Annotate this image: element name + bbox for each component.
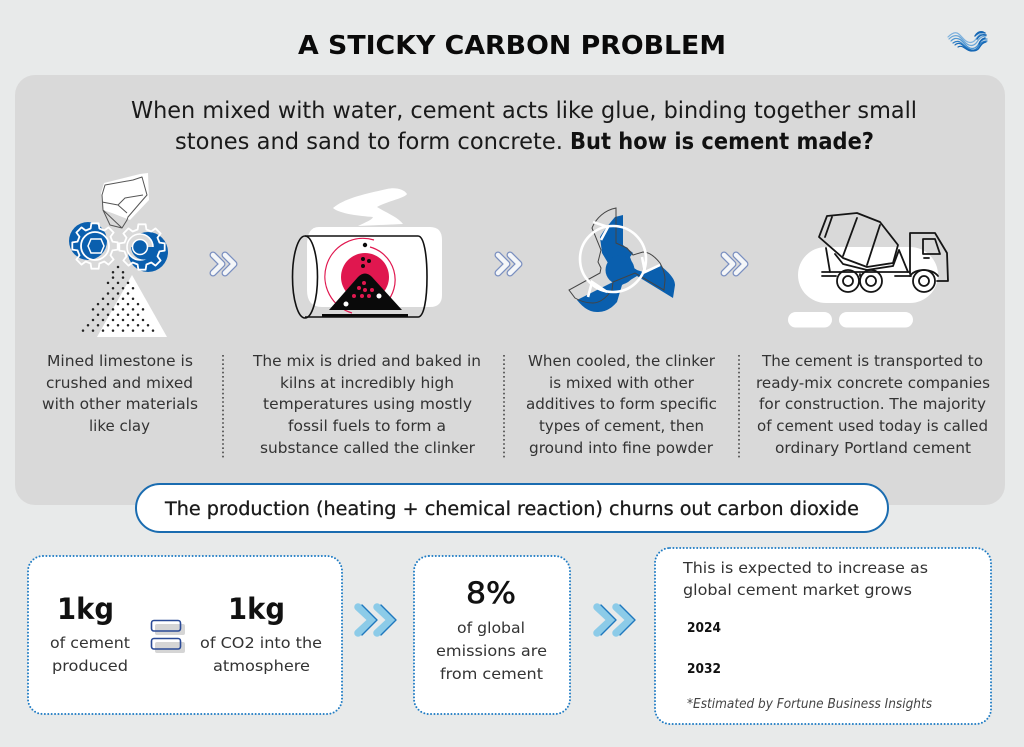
icon: wave logo [948,32,987,51]
text: step 2: The mix is dried and baked in [252,352,481,370]
panel: market growth [655,548,991,724]
arrow: step 1 to 2 [213,255,234,273]
text: step 3: types of cement, then [539,417,704,435]
intro text: stones and sand to form concrete. [175,127,563,155]
icon: limestone crushed by gears [69,173,168,337]
stat: 1kg of CO2: of CO2 into the [200,634,322,652]
stat: 1kg of cement [50,592,130,675]
stat: 1kg of cement: of cement [50,634,130,652]
stat: 1kg of CO2: atmosphere [213,657,310,675]
intro text: But how is cement made? [570,127,874,155]
panel: 1kg equals 1kg [28,556,342,714]
text: step 4 [756,352,990,457]
text: step 2: temperatures using mostly [263,395,472,413]
intro text: When mixed with water, cement acts like glue, binding together small [131,96,917,124]
label: 2024: 2024 [687,621,721,636]
text: step 3: ground into fine powder [529,439,714,457]
text: step 2: kilns at incredibly high [280,374,454,392]
text: market growth heading: This is expected to increase as [682,559,928,577]
text: step 1: crushed and mixed [46,374,193,392]
panel: 8 percent of emissions: 8% [466,576,516,610]
panel: 8 percent of emissions: of global [457,619,525,637]
panel: 8 percent of emissions [414,556,570,714]
footnote: *Estimated by Fortune Business Insights [687,696,932,712]
stat: 1kg of CO2: 1kg [228,592,285,626]
text: step 4: ready-mix concrete companies [756,374,990,392]
text: step 2 [252,352,481,457]
callout: production pill [136,484,888,532]
icon: cement mixer truck [788,213,948,328]
title: A STICKY CARBON PROBLEM [298,31,726,61]
panel: how cement is made [15,75,1005,505]
arrow: to 8 percent [358,605,396,635]
text: step 1: like clay [89,417,150,435]
arrow: step 3 to 4 [724,255,745,273]
text: step 3: is mixed with other [549,374,695,392]
stat: 1kg of CO2 [200,592,322,675]
label: 2032: 2032 [687,662,721,677]
text: step 2: substance called the clinker [260,439,476,457]
text: step 4: for construction. The majority [759,395,986,413]
panel: 8 percent of emissions: from cement [440,665,543,683]
stat: 1kg of cement: 1kg [57,592,114,626]
text: step 4: The cement is transported to [761,352,983,370]
text: step 3: additives to form specific [526,395,717,413]
icon: right gear [119,224,168,272]
text: step 2: fossil fuels to form a [288,417,446,435]
icon: equals sign [152,620,185,653]
text: step 1: with other materials [42,395,198,413]
text: step 1: Mined limestone is [47,352,193,370]
stat: 1kg of cement: produced [52,657,128,675]
text: step 3: When cooled, the clinker [528,352,716,370]
text: step 3 [526,352,717,457]
text: market growth heading [682,559,928,599]
icon: clinker mixing blades [569,208,675,312]
arrow: to market growth [597,605,635,635]
text: step 4: of cement used today is called [757,417,988,435]
text: step 1 [42,352,198,435]
icon: rock [101,173,149,228]
panel: 8 percent of emissions: emissions are [436,642,547,660]
arrow: step 2 to 3 [498,255,519,273]
icon: left gear [69,222,118,269]
icon: powder pile [83,267,167,337]
icon: kiln [292,188,442,318]
callout: production pill: The production (heating + chemical reaction) churns out carbon dioxide [164,499,859,520]
text: step 4: ordinary Portland cement [775,439,971,457]
intro text [131,96,917,155]
text: market growth heading: global cement market grows [683,581,912,599]
